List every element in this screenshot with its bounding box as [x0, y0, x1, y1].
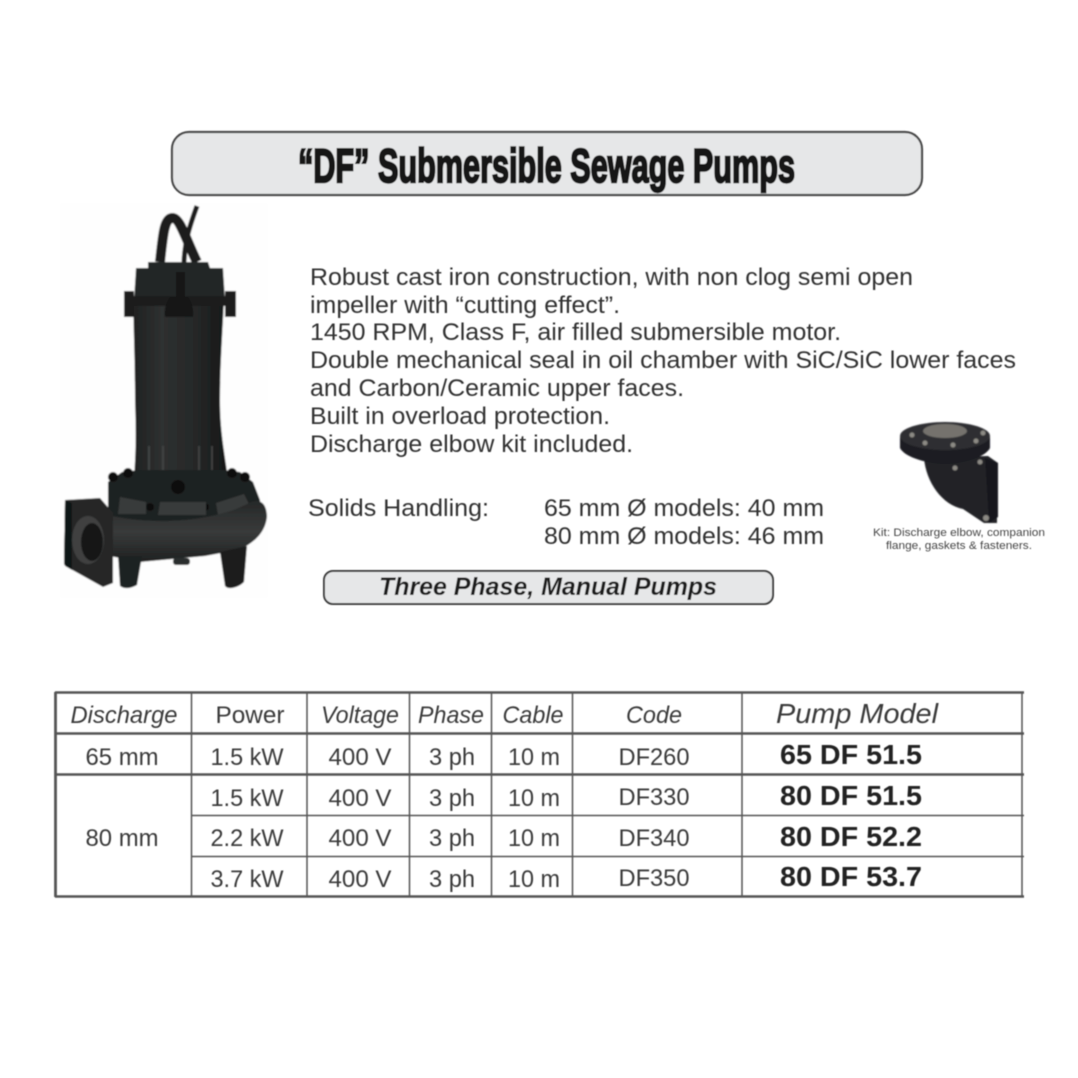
row: DF340 — [210, 821, 922, 852]
body ribs — [149, 446, 212, 478]
row: DF350: 400 V — [328, 866, 392, 893]
discharge column — [86, 744, 158, 852]
row: DF340: 2.2 kW — [210, 825, 284, 852]
elbow kit photo — [900, 422, 998, 523]
description text: Discharge elbow kit included. — [310, 431, 633, 458]
table grid — [55, 692, 1024, 897]
centre lug — [165, 272, 193, 317]
row: DF350 — [210, 861, 922, 893]
row: DF340: 80 DF 52.2 — [780, 821, 922, 852]
title banner: “DF” Submersible Sewage Pumps — [298, 139, 795, 192]
row: DF260: 3 ph — [429, 744, 475, 771]
table header: Cable — [502, 702, 564, 729]
title banner — [172, 132, 922, 195]
elbow kit caption: Kit: Discharge elbow, companion — [873, 527, 1045, 539]
solids handling: 80 mm Ø models: 46 mm — [544, 523, 824, 550]
description text: Built in overload protection. — [310, 403, 610, 430]
row: DF350: 3 ph — [429, 866, 475, 893]
row: DF350: 3.7 kW — [210, 866, 284, 893]
subtitle banner — [324, 571, 773, 604]
table header: Discharge — [70, 702, 178, 729]
description text: 1450 RPM, Class F, air filled submersible motor. — [310, 319, 841, 346]
table header: Voltage — [321, 702, 399, 729]
row: DF350: 10 m — [508, 866, 560, 893]
row: DF330: 1.5 kW — [210, 785, 284, 812]
base plates — [118, 494, 250, 515]
flange lugs — [124, 291, 236, 317]
discharge column: 80 mm — [86, 825, 158, 852]
table header: Power — [216, 702, 285, 729]
table header: Code — [626, 702, 682, 729]
row: DF330: 400 V — [328, 785, 392, 812]
pump photo — [60, 203, 268, 598]
description text — [310, 264, 1016, 458]
row: DF260: DF260 — [618, 744, 690, 771]
specification table — [55, 692, 1024, 897]
elbow kit caption: flange, gaskets & fasteners. — [886, 540, 1032, 552]
row: DF340: 10 m — [508, 825, 560, 852]
base flange — [108, 470, 262, 530]
solids handling: Solids Handling: — [308, 495, 489, 522]
row: DF260: 1.5 kW — [210, 744, 284, 771]
row: DF330: 10 m — [508, 785, 560, 812]
row: DF260: 10 m — [508, 744, 560, 771]
elbow kit caption — [873, 527, 1045, 552]
table header: Pump Model — [776, 698, 939, 729]
row: DF340: 400 V — [328, 825, 392, 852]
description text: and Carbon/Ceramic upper faces. — [310, 375, 684, 402]
row: DF260: 65 DF 51.5 — [780, 739, 922, 770]
row: DF260 — [210, 739, 922, 771]
volute casing — [104, 501, 267, 562]
row: DF330 — [210, 780, 922, 812]
outlet flange — [64, 498, 113, 587]
bolts — [910, 430, 989, 521]
table header: Phase — [418, 702, 484, 729]
row: DF340: DF340 — [618, 825, 690, 852]
description text: Double mechanical seal in oil chamber with SiC/SiC lower faces — [310, 347, 1016, 374]
solids handling — [308, 495, 824, 550]
legs — [118, 556, 142, 588]
photo backdrop — [60, 203, 268, 598]
discharge column: 65 mm — [86, 744, 158, 771]
description text: impeller with “cutting effect”. — [310, 292, 620, 319]
cables — [160, 206, 197, 262]
description text: Robust cast iron construction, with non clog semi open — [310, 264, 913, 291]
row: DF260: 400 V — [328, 744, 392, 771]
row: DF330: 80 DF 51.5 — [780, 780, 922, 811]
motor body — [133, 300, 228, 478]
row: DF330: 3 ph — [429, 785, 475, 812]
row: DF330: DF330 — [618, 784, 690, 811]
solids handling: 65 mm Ø models: 40 mm — [544, 495, 824, 522]
row: DF340: 3 ph — [429, 825, 475, 852]
table header — [70, 698, 939, 729]
motor cap — [134, 262, 225, 300]
row: DF350: DF350 — [618, 865, 690, 892]
row: DF350: 80 DF 53.7 — [780, 861, 922, 892]
subtitle banner: Three Phase, Manual Pumps — [379, 573, 717, 601]
